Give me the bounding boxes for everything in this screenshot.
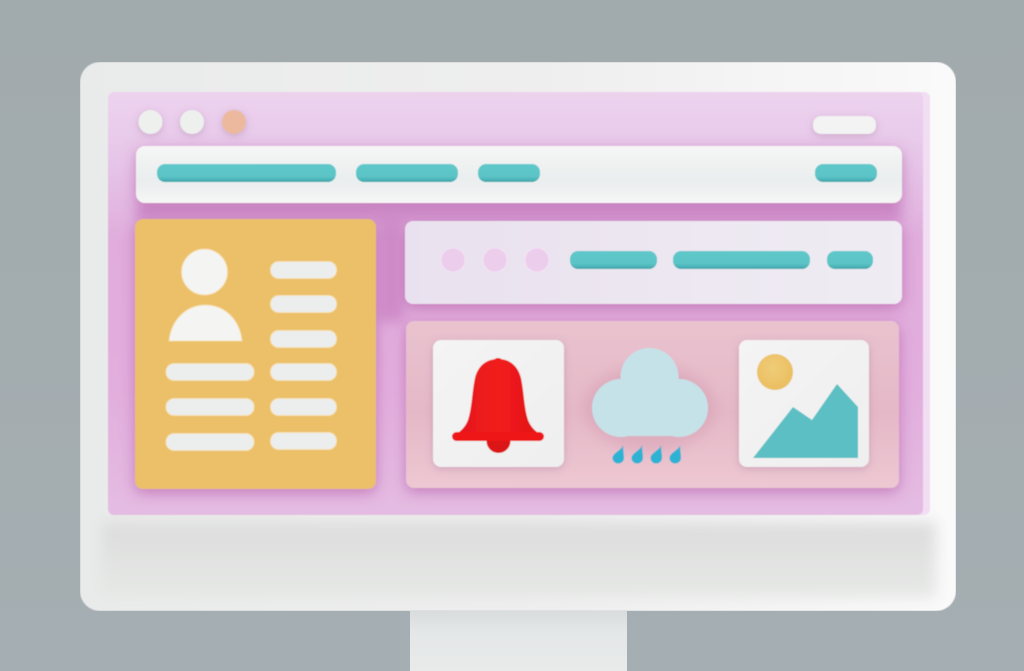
cloud shadow halo	[584, 364, 716, 452]
window control dots	[138, 110, 246, 134]
monitor body	[80, 62, 956, 611]
icon: image tile	[739, 340, 869, 467]
mountains	[753, 384, 858, 458]
icon: user avatar	[169, 249, 242, 341]
icon: bell tile	[433, 340, 564, 467]
monitor stand	[410, 611, 627, 671]
rain drops	[612, 445, 681, 464]
icon: rain cloud	[592, 348, 708, 464]
toolbar pills	[570, 251, 873, 269]
secondary toolbar	[405, 221, 902, 304]
profile text lines	[166, 262, 336, 450]
icon: red bell	[452, 358, 544, 453]
navigation pills	[157, 164, 877, 182]
profile card	[135, 219, 376, 489]
top navigation bar	[136, 146, 902, 203]
window panel	[108, 92, 930, 515]
cloud	[592, 348, 708, 437]
toolbar dots	[441, 248, 549, 272]
sun	[757, 354, 793, 390]
deep shading between panels	[136, 204, 902, 322]
media panel	[406, 321, 899, 488]
small window button	[813, 116, 876, 134]
monitor chin	[100, 522, 936, 598]
illustration: desktop monitor with interface	[80, 62, 956, 671]
